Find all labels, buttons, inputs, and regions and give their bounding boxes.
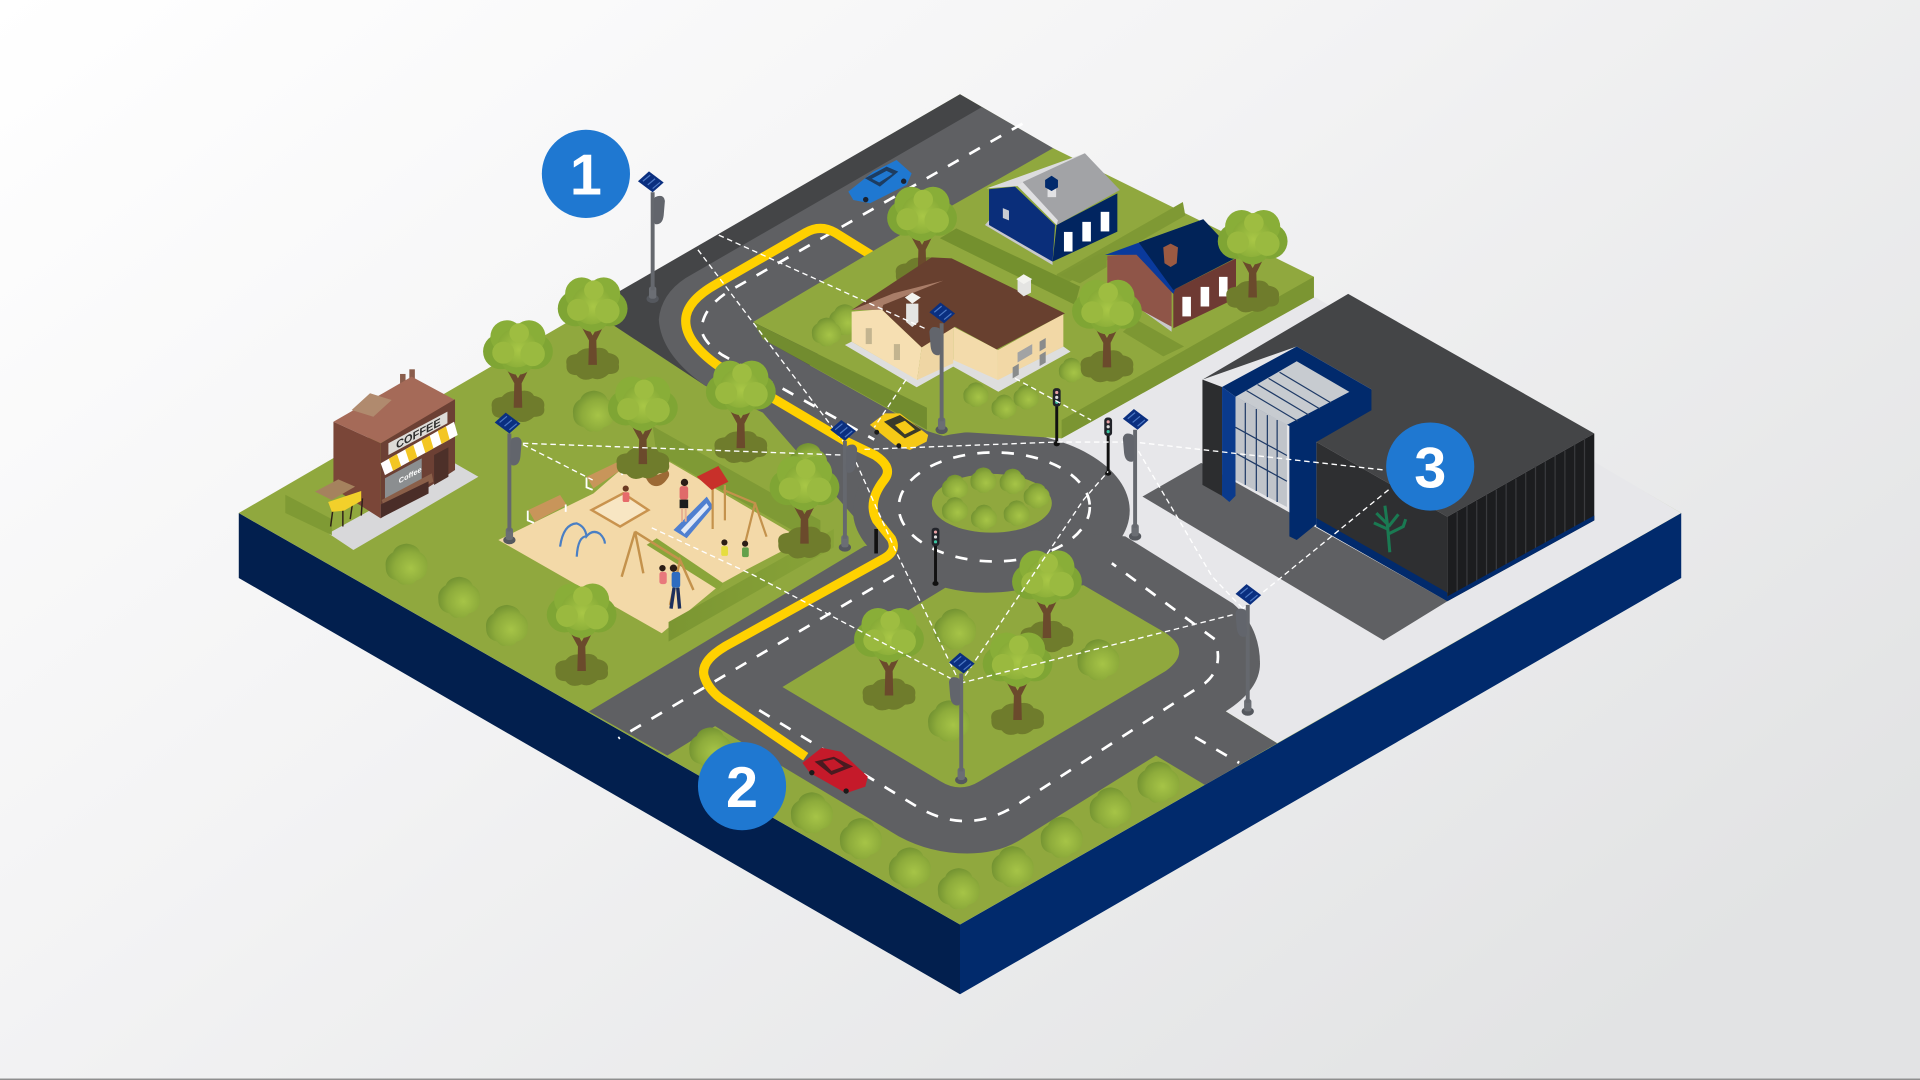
shop window: Coffee bbox=[399, 465, 422, 485]
blue door frame bbox=[1222, 347, 1371, 540]
tree bbox=[1012, 550, 1082, 653]
tree bbox=[983, 632, 1052, 735]
platform top bbox=[239, 94, 1681, 924]
central green block bbox=[782, 585, 1179, 787]
number badge 1: 1 bbox=[570, 144, 602, 208]
blue house bbox=[985, 153, 1120, 265]
bushes in roundabout bbox=[942, 467, 1050, 530]
bench bbox=[587, 462, 623, 490]
tree bbox=[706, 361, 776, 463]
number badge 2 bbox=[698, 742, 786, 830]
coffee sign: COFFEE bbox=[396, 416, 441, 452]
shop window bbox=[385, 458, 422, 500]
traffic light bbox=[932, 528, 939, 586]
tree bbox=[770, 456, 839, 559]
coffee shop bbox=[285, 369, 478, 550]
coffee sign bbox=[388, 412, 447, 455]
number badge 2: 2 bbox=[726, 756, 758, 820]
number badge 3: 3 bbox=[1414, 436, 1446, 500]
traffic light bbox=[1053, 388, 1061, 446]
central traffic island bbox=[932, 474, 1052, 533]
tree bbox=[558, 277, 628, 380]
tree bbox=[854, 608, 924, 710]
roller door bbox=[1236, 361, 1349, 507]
platform left side bbox=[239, 513, 960, 994]
tree bbox=[483, 320, 553, 423]
adult near slide bbox=[680, 479, 688, 522]
solar street lamp bbox=[949, 653, 975, 784]
asphalt forecourt bbox=[1142, 463, 1447, 640]
traffic light bbox=[1104, 418, 1112, 476]
climbing frame bbox=[560, 523, 605, 557]
sensor network links bbox=[523, 235, 1389, 683]
brown house bbox=[1105, 219, 1238, 332]
tree bbox=[1072, 280, 1142, 382]
tree bbox=[1218, 210, 1288, 312]
solar street lamp bbox=[830, 420, 857, 552]
child on swing bbox=[659, 565, 667, 584]
number badge 1 bbox=[542, 130, 630, 218]
solar street lamp bbox=[929, 302, 955, 434]
yellow route bbox=[686, 228, 906, 757]
yellow car bbox=[870, 413, 928, 450]
sandbox bbox=[592, 493, 648, 527]
park hedges and playground bbox=[498, 426, 834, 642]
warehouse bbox=[1202, 294, 1594, 601]
children playing bbox=[623, 486, 749, 557]
tree bbox=[547, 583, 617, 686]
solar street lamp bbox=[1123, 409, 1149, 541]
red car bbox=[802, 748, 868, 794]
beige house bbox=[845, 257, 1071, 392]
play tower bbox=[697, 466, 767, 543]
road centre dashes bbox=[618, 124, 1239, 821]
road network bbox=[589, 107, 1277, 853]
toy animal bbox=[645, 470, 669, 486]
bench bbox=[528, 495, 567, 523]
solar street lamp bbox=[638, 171, 665, 303]
tree logo bbox=[1374, 506, 1406, 552]
solar street lamp bbox=[495, 413, 522, 544]
tree bbox=[608, 377, 678, 479]
platform right side bbox=[960, 513, 1681, 994]
slide bbox=[673, 497, 713, 538]
swing set bbox=[622, 532, 693, 605]
striped awning bbox=[381, 422, 458, 475]
number badge 3 bbox=[1386, 422, 1474, 511]
cafe table and chairs bbox=[315, 479, 362, 527]
concrete yard bbox=[1041, 296, 1681, 743]
adult at swing bbox=[670, 564, 680, 609]
roadside bushes bbox=[386, 304, 1179, 909]
traffic light stub behind route bbox=[874, 529, 878, 553]
dark pavement strip bbox=[609, 94, 983, 404]
residential lot bbox=[753, 148, 1314, 438]
solar street lamp bbox=[1236, 584, 1261, 716]
tree bbox=[887, 187, 957, 289]
blue car bbox=[848, 160, 912, 203]
